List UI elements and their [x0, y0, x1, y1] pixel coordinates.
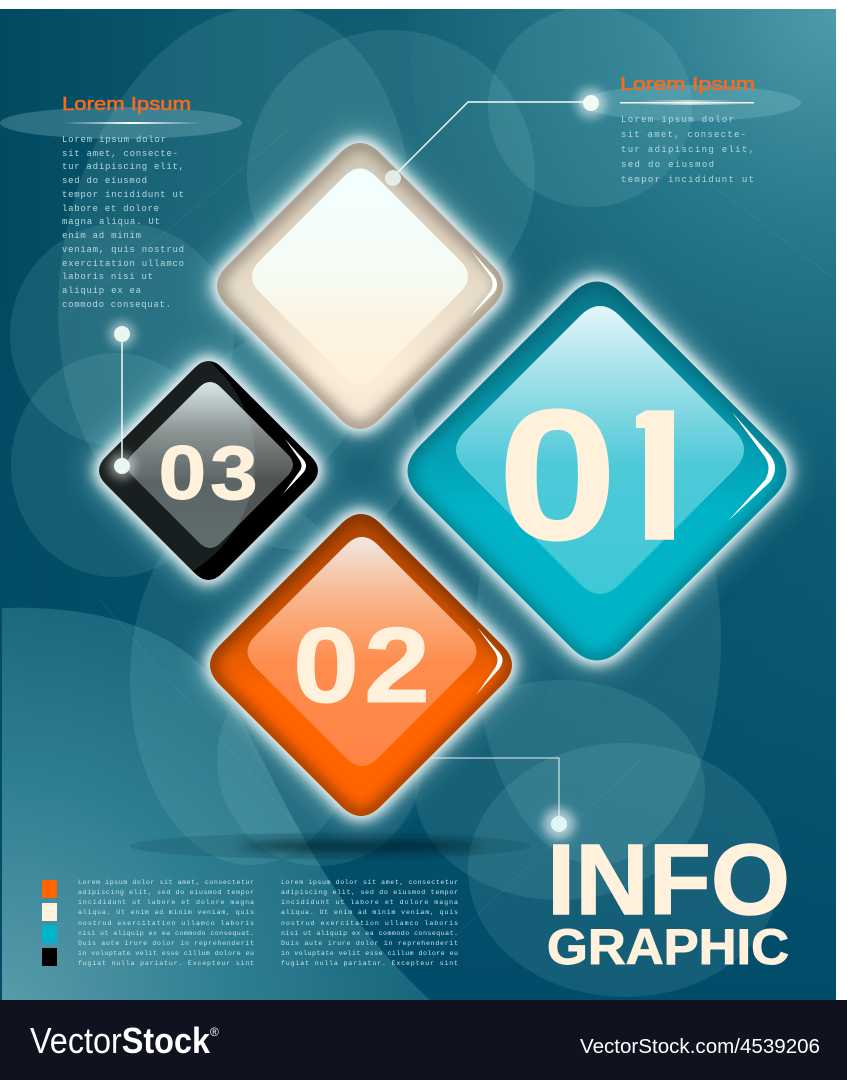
diamond glows — [99, 143, 792, 828]
text column 2 — [281, 879, 458, 967]
text column 2: aliqua. Ut enim ad minim veniam, quis — [281, 909, 458, 916]
title: INFO: INFO — [547, 824, 790, 936]
header ellipse right — [579, 85, 801, 121]
text column 2: incididunt ut labore et dolore magna — [281, 899, 458, 906]
heading: left: Lorem Ipsum — [62, 94, 191, 114]
number 02: 02 — [293, 605, 430, 725]
text column 2: in voluptate velit esse cillum dolore eu — [281, 950, 458, 957]
text column 2: nisi ut aliquip ex ea commodo consequat. — [281, 930, 458, 937]
registered mark: ® — [210, 1025, 219, 1039]
text column 1: adipiscing elit, sed do eiusmod tempor — [78, 889, 254, 896]
header ellipse left — [0, 107, 242, 139]
text column 1: nostrud exercitation ullamco laboris — [78, 920, 254, 927]
watermark logo: VectorStock — [30, 1020, 211, 1061]
text column 2: nostrud exercitation ullamco laboris — [281, 920, 458, 927]
text column 2: Lorem ipsum dolor sit amet, consectetur — [281, 879, 458, 886]
colour legend — [42, 880, 57, 966]
connector: paper to top right — [385, 88, 606, 186]
text block: right: sed do eiusmod — [621, 160, 714, 170]
text block: left: labore et dolore — [62, 204, 159, 214]
text block: left: veniam, quis nostrud — [62, 245, 184, 255]
diamond: paper blank — [217, 143, 503, 429]
text column 1: in voluptate velit esse cillum dolore eu — [78, 950, 254, 957]
watermark url: VectorStock.com/4539206 — [580, 1036, 820, 1058]
title: GRAPHIC: GRAPHIC — [547, 919, 789, 975]
text column 2: Duis aute irure dolor in reprehenderit — [281, 940, 458, 947]
connector: 02 — [432, 758, 575, 840]
text block: left: magna aliqua. Ut — [62, 217, 160, 227]
text column 1: Lorem ipsum dolor sit amet, consectetur — [78, 879, 254, 886]
diamond: 03 — [99, 361, 318, 580]
heading rule: left — [63, 122, 201, 124]
text column 1: aliqua. Ut enim ad minim veniam, quis — [78, 909, 254, 916]
text block: right — [621, 115, 754, 185]
watermark band — [0, 1000, 847, 1080]
text block: left: Lorem ipsum dolor — [62, 135, 166, 145]
text column 2: adipiscing elit, sed do eiusmod tempor — [281, 889, 458, 896]
text column 1: Duis aute irure dolor in reprehenderit — [78, 940, 254, 947]
text column 1: nisi ut aliquip ex ea commodo consequat. — [78, 930, 254, 937]
text block: left: aliquip ex ea — [62, 286, 142, 296]
text block: left: tur adipiscing elit, — [62, 162, 184, 172]
number 01: 0 — [498, 372, 617, 579]
text block: left: tempor incididunt ut — [62, 190, 184, 200]
number 03: 03 — [158, 432, 258, 516]
text block: left — [62, 135, 184, 310]
text block: right: Lorem ipsum dolor — [621, 115, 734, 125]
text column 2: fugiat nulla pariatur. Excepteur sint — [281, 960, 458, 967]
text block: left: commodo consequat. — [62, 300, 171, 310]
floor shadow — [130, 833, 530, 859]
text block: left: enim ad minim — [62, 231, 141, 241]
text block: right: tempor incididunt ut — [621, 175, 754, 185]
number 01: 1 — [595, 372, 714, 579]
heading rule: right — [620, 100, 754, 105]
text block: left: sit amet, consecte- — [62, 149, 178, 159]
text block: left: sed do eiusmod — [62, 176, 147, 186]
connector: 03 — [109, 321, 135, 479]
heading: right: Lorem Ipsum — [620, 74, 755, 94]
text column 1: incididunt ut labore et dolore magna — [78, 899, 254, 906]
text column 1 — [78, 879, 254, 967]
diamond: 02 — [210, 514, 512, 816]
text block: right: sit amet, consecte- — [621, 130, 746, 140]
text block: right: tur adipiscing elit, — [621, 145, 754, 155]
diamond: 01 — [408, 282, 786, 660]
text column 1: fugiat nulla pariatur. Excepteur sint — [78, 960, 254, 967]
text block: left: exercitation ullamco — [62, 259, 184, 269]
number 01 — [506, 408, 674, 542]
text block: left: laboris nisi ut — [62, 272, 153, 282]
